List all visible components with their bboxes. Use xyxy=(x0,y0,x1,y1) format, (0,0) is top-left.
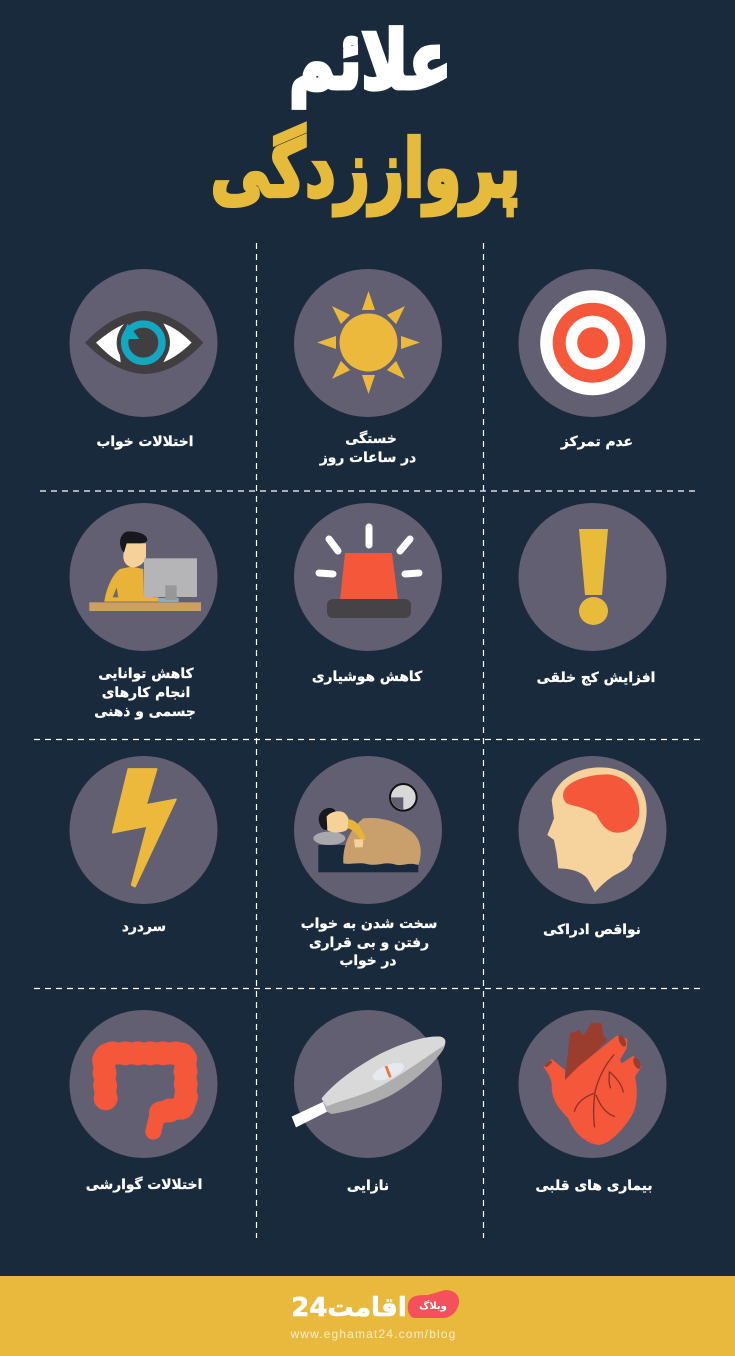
label: جسمی و ذهنی xyxy=(94,704,196,720)
panel: cognitive deficits xyxy=(518,756,666,938)
panel: loss of concentration xyxy=(518,269,666,450)
icon: person sleeping with clock xyxy=(313,784,421,872)
label: سردرد xyxy=(122,919,166,935)
panel: reduced ability xyxy=(70,503,218,720)
panel: difficulty sleeping xyxy=(294,756,442,969)
icon: target xyxy=(540,290,645,395)
panel: infertility xyxy=(292,1010,445,1194)
label: کاهش توانایی xyxy=(98,666,195,682)
panel: sleep disorders xyxy=(70,269,218,450)
url: www.eghamat24.com/blog xyxy=(289,1327,457,1341)
title: second line: پرواززدگی xyxy=(211,124,520,216)
icon: alarm light xyxy=(319,527,419,618)
panel: daytime tiredness xyxy=(294,269,442,466)
label: رفتن و بی قراری xyxy=(309,935,429,951)
panel: reduced alertness xyxy=(294,503,442,685)
icon: colon xyxy=(104,1053,186,1132)
label: اختلالات گوارشی xyxy=(86,1176,202,1193)
icon: eye xyxy=(85,311,203,374)
panel: irritability xyxy=(518,503,666,686)
panel: digestive disorders xyxy=(70,1010,218,1193)
label xyxy=(301,916,437,969)
label: کاهش هوشیاری xyxy=(312,669,423,685)
label: در ساعات روز xyxy=(319,450,416,466)
title: first line: علائم xyxy=(289,15,451,108)
icon: head with brain xyxy=(547,767,647,892)
icon: lightning bolt xyxy=(113,769,176,887)
icon: sun xyxy=(317,291,420,394)
label: انجام کارهای xyxy=(102,685,190,701)
logo: وبلاگ xyxy=(419,1299,447,1312)
label xyxy=(319,430,416,466)
icon: exclamation mark xyxy=(579,529,608,625)
icon: heart xyxy=(543,1022,642,1145)
panel: heart disease xyxy=(518,1010,666,1194)
panel: headache xyxy=(70,756,218,935)
label xyxy=(94,666,196,720)
label: افزایش کج خلقی xyxy=(537,670,655,686)
icon: person at desk xyxy=(89,531,201,611)
label: بیماری های قلبی xyxy=(535,1178,653,1194)
label: اختلالات خواب xyxy=(97,434,193,450)
label: نواقص ادراکی xyxy=(543,922,641,938)
footer band xyxy=(0,1276,735,1356)
label: سخت شدن به خواب xyxy=(301,916,437,932)
label: عدم تمرکز xyxy=(560,434,633,450)
logo xyxy=(291,1290,459,1323)
logo: اقامت24 xyxy=(291,1293,407,1323)
icon: test stick xyxy=(292,1037,445,1127)
label: خستگی xyxy=(345,430,397,447)
label: نازایی xyxy=(347,1178,389,1194)
label: در خواب xyxy=(339,953,397,969)
